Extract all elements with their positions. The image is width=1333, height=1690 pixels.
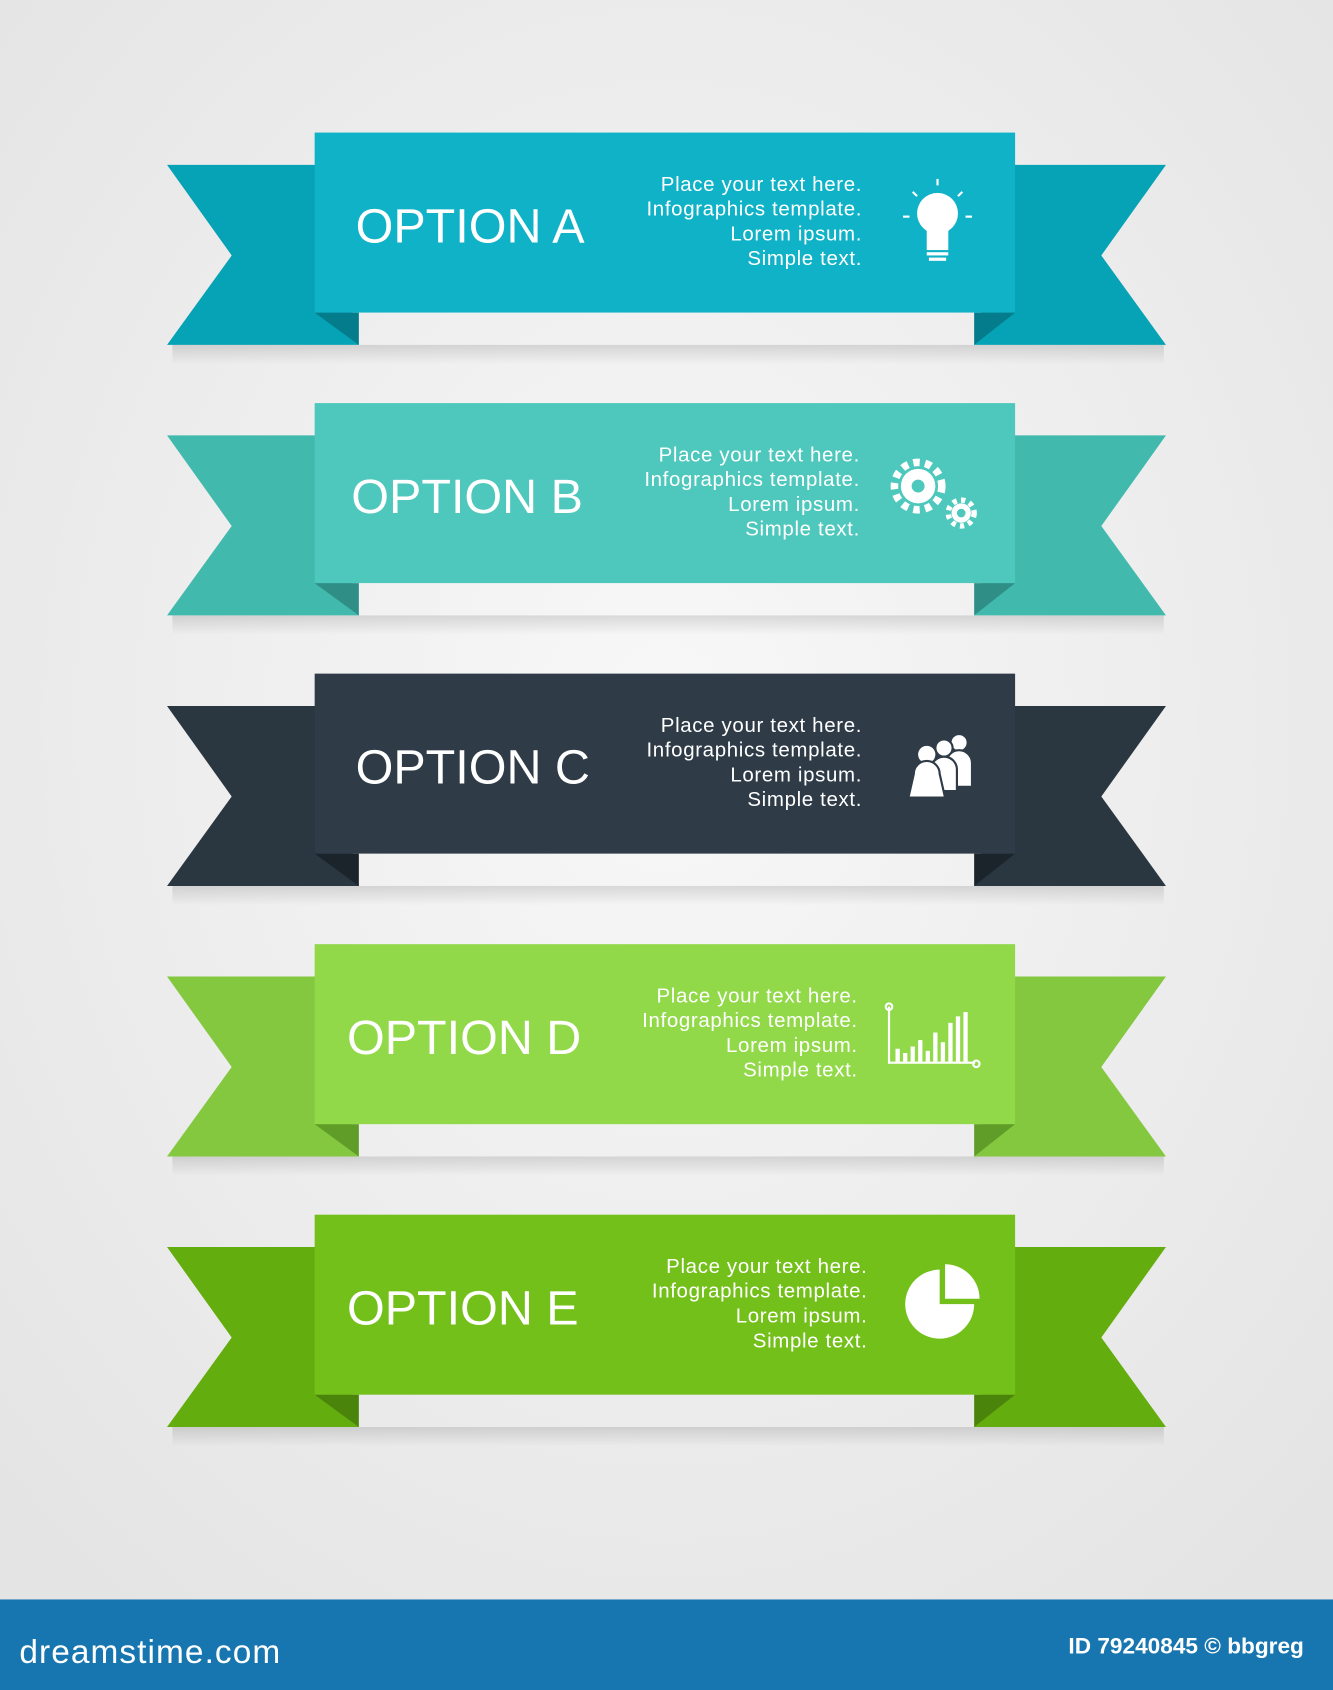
heading: option E: OPTION E bbox=[347, 1282, 579, 1336]
text block B bbox=[644, 443, 860, 541]
text block A bbox=[646, 173, 862, 270]
ribbon: option D bbox=[167, 944, 1166, 1176]
heading: option A: OPTION A bbox=[356, 200, 585, 254]
footer logo text: dreamstime.com bbox=[19, 1634, 281, 1671]
icon: pie chart bbox=[905, 1264, 980, 1339]
footer bar bbox=[0, 1599, 1333, 1690]
heading: option B: OPTION B bbox=[351, 470, 583, 524]
icon: people bbox=[908, 734, 972, 798]
heading: option C: OPTION C bbox=[356, 741, 590, 795]
icon: gears bbox=[894, 462, 974, 526]
ribbon: option E bbox=[167, 1215, 1166, 1446]
heading: option D: OPTION D bbox=[347, 1011, 581, 1065]
ribbon: option A bbox=[167, 133, 1166, 364]
text block C bbox=[646, 714, 862, 811]
footer id text: ID 79240845 © bbgreg bbox=[1068, 1633, 1304, 1658]
icon: light bulb bbox=[903, 179, 972, 261]
text block E bbox=[652, 1255, 867, 1352]
ribbon: option C bbox=[167, 674, 1166, 905]
ribbon: option B bbox=[167, 403, 1166, 635]
text block D bbox=[642, 984, 858, 1082]
icon: bar chart bbox=[886, 1003, 980, 1067]
